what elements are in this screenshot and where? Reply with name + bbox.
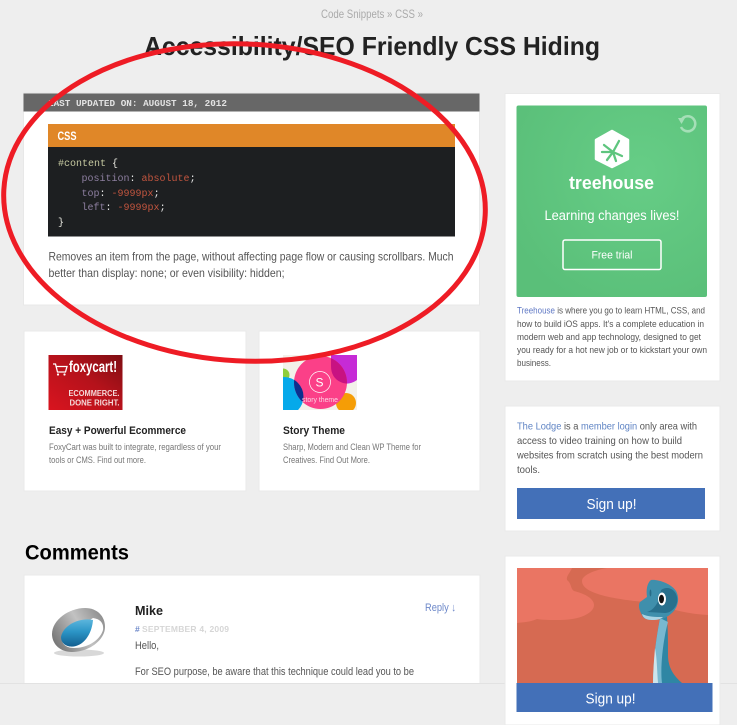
last updated bar [24, 94, 480, 112]
dinosaur neck [653, 617, 682, 683]
code block: #content { [58, 158, 118, 170]
story theme banner: S [316, 376, 324, 390]
treehouse ad: treehouse [569, 173, 654, 193]
comment text: For SEO purpose, be aware that this technique could lead you to be [135, 666, 414, 678]
code block: top: -9999px; [82, 189, 160, 200]
lodge text [516, 420, 703, 476]
breadcrumb: Code Snippets » CSS » [321, 7, 423, 21]
treehouse text: you ready for a hot new job or to kickstart your own [517, 345, 707, 356]
ad description [49, 442, 221, 465]
treehouse text: modern web and app technology, designed to get [517, 332, 701, 343]
treehouse text [517, 306, 707, 369]
last updated bar: LAST UPDATED ON: AUGUST 18, 2012 [48, 98, 227, 109]
code block: } [58, 217, 64, 229]
comment author: Mike [135, 603, 163, 618]
ad heading: Easy + Powerful Ecommerce [49, 425, 186, 437]
code block [48, 147, 455, 236]
story theme banner [283, 355, 357, 410]
treehouse ad: Learning changes lives! [544, 208, 680, 223]
lodge text: websites from scratch using the best modern [516, 450, 703, 462]
article text [48, 250, 454, 280]
panel: foxycart ad [24, 331, 246, 491]
sign up button: Sign up! [586, 690, 636, 708]
ad heading: Story Theme [283, 425, 345, 437]
avatar: eye [52, 608, 105, 656]
code header: CSS [58, 131, 77, 143]
panel: comment [24, 575, 480, 690]
foxycart banner: ECOMMERCE. [68, 389, 120, 398]
reply link: Reply ↓ [425, 602, 456, 614]
foxycart banner [48, 355, 122, 410]
treehouse ad [516, 106, 707, 297]
ad description: FoxyCart was built to integrate, regardless of your [49, 442, 221, 452]
treehouse text: business. [517, 358, 551, 369]
panel: article [24, 93, 480, 305]
article text: better than display: none; or even visibility: hidden; [48, 266, 284, 280]
lodge text: access to video training on how to build [517, 435, 682, 447]
panel: dinosaur [505, 556, 720, 725]
foxycart banner: DONE RIGHT. [70, 398, 120, 408]
icon: treehouse logo [596, 131, 628, 167]
comment date: # [135, 624, 140, 634]
ad description [283, 442, 421, 465]
ad description: tools or CMS. Find out more. [49, 455, 146, 465]
red hand-drawn ellipse annotation [0, 32, 493, 373]
bottom bar background [0, 683, 737, 725]
panel: story theme ad [259, 331, 480, 491]
comment text [135, 640, 414, 678]
story theme banner: story theme [302, 397, 338, 404]
sign up button: Sign up! [586, 496, 636, 513]
ad description: Sharp, Modern and Clean WP Theme for [283, 442, 421, 452]
code block: position: absolute; [82, 173, 196, 185]
icon: replay [678, 116, 695, 131]
panel: treehouse [505, 94, 720, 381]
dinosaur illustration [517, 568, 708, 683]
comment date: SEPTEMBER 4, 2009 [142, 624, 229, 634]
dinosaur head [639, 580, 678, 620]
title: Accessibility/SEO Friendly CSS Hiding [144, 31, 600, 61]
treehouse text: Treehouse is where you go to learn HTML, CSS, and [517, 306, 705, 316]
free trial button: Free trial [592, 250, 632, 262]
treehouse text: how to build iOS apps. It's a complete education in [517, 319, 704, 330]
ad description: Creatives. Find Out More. [283, 455, 370, 465]
lodge text: tools. [517, 464, 540, 476]
comments heading: Comments [25, 542, 129, 564]
foxycart banner: foxycart! [69, 359, 117, 376]
lodge text: The Lodge is a member login only area with [517, 420, 697, 432]
code block: left: -9999px; [82, 202, 166, 214]
sign up button [516, 683, 712, 712]
panel: the lodge [505, 406, 720, 531]
comment text: Hello, [135, 640, 159, 652]
sign up button [517, 488, 705, 519]
article text: Removes an item from the page, without affecting page flow or causing scrollbars. Much [48, 250, 454, 264]
free trial button [563, 240, 661, 270]
code header [48, 124, 455, 147]
